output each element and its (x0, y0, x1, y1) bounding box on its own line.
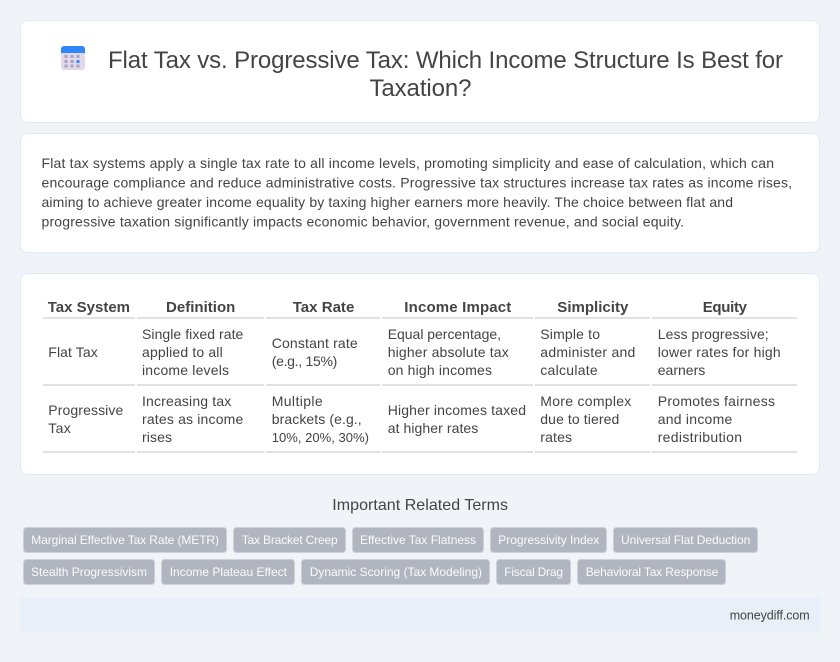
table row: progressive tax (48, 393, 775, 445)
panel: comparison table (20, 274, 820, 474)
table row: progressive tax: Higher incomes taxed (388, 402, 526, 418)
heading: important related terms: Important Related Terms (332, 497, 508, 514)
table row: progressive tax: redistribution (658, 429, 742, 445)
table row: flat tax: Less progressive; (658, 326, 769, 342)
table row: progressive tax: at higher rates (388, 420, 478, 436)
table row: flat tax: (e.g., 15%) (272, 353, 337, 369)
table row: flat tax: on high incomes (388, 362, 492, 378)
table row: flat tax: earners (658, 362, 705, 378)
text block: introduction: progressive taxation significantly impacts economic behavior, government revenue, and social equity. (42, 214, 684, 230)
table row: flat tax: income levels (142, 362, 229, 378)
tag list: related terms: Fiscal Drag (504, 565, 563, 579)
table row: flat tax: calculate (540, 362, 598, 378)
title: Flat Tax vs. Progressive Tax: Which Income Structure Is Best for (108, 47, 783, 74)
text block: introduction: encourage compliance and reduce administrative costs. Progressive tax structures increase tax rates as income rises, (42, 174, 792, 190)
table row: flat tax (48, 326, 781, 378)
table header row: Tax Rate (293, 299, 354, 316)
table row: progressive tax: Promotes fairness (658, 393, 775, 409)
table row: progressive tax: brackets (e.g., (272, 411, 362, 427)
tag list: related terms (24, 528, 758, 584)
footer source text: moneydiff.com (730, 608, 810, 622)
table row: progressive tax: due to tiered (540, 411, 619, 427)
tag list: related terms: Effective Tax Flatness (360, 533, 476, 547)
icon: calendar (61, 46, 85, 70)
table row: progressive tax: Increasing tax (142, 393, 231, 409)
table row: progressive tax: rates as income (142, 411, 244, 427)
table row: progressive tax: Multiple (272, 393, 323, 409)
table row: flat tax: Equal percentage, (388, 326, 501, 342)
table row: flat tax: Constant rate (272, 335, 358, 351)
title (108, 47, 783, 102)
table header row: Definition (166, 299, 235, 316)
tag list: related terms: Income Plateau Effect (170, 565, 288, 579)
table row: flat tax: Single fixed rate (142, 326, 244, 342)
table header row: Income Impact (404, 299, 511, 316)
table row: progressive tax: 10%, 20%, 30%) (272, 430, 369, 445)
tag list: related terms: Stealth Progressivism (31, 565, 147, 579)
table row: progressive tax: rates (540, 429, 572, 445)
table row: flat tax: higher absolute tax (388, 344, 509, 360)
footer bar (20, 598, 820, 632)
text block: introduction (42, 155, 792, 230)
table row: progressive tax: Progressive (48, 402, 124, 418)
title: Taxation? (370, 75, 472, 102)
tag list: related terms: Progressivity Index (498, 533, 599, 547)
table row: progressive tax: rises (142, 429, 172, 445)
table header row: Tax System (48, 299, 130, 316)
table row: flat tax: lower rates for high (658, 344, 781, 360)
table row: flat tax: Flat Tax (48, 344, 98, 360)
text block: introduction: Flat tax systems apply a single tax rate to all income levels, promoting simplicity and ease of calculation, which can (42, 155, 774, 171)
table row: flat tax: Simple to (540, 326, 600, 342)
text block: introduction: aiming to achieve greater income equality by taxing higher earners more heavily. The choice between flat and (42, 194, 733, 210)
tag list: related terms: Marginal Effective Tax Rate (METR) (31, 533, 219, 547)
table row: progressive tax: Tax (48, 420, 71, 436)
tag list: related terms: Tax Bracket Creep (242, 533, 338, 547)
panel: title header (20, 20, 820, 122)
tag list: related terms: Universal Flat Deduction (621, 533, 750, 547)
panel: introduction paragraph (20, 134, 820, 252)
table row: flat tax: administer and (540, 344, 635, 360)
tag list: related terms: Behavioral Tax Response (586, 565, 719, 579)
table header row: Equity (703, 299, 748, 316)
table row: flat tax: applied to all (142, 344, 223, 360)
table row: progressive tax: More complex (540, 393, 631, 409)
tag list: related terms: Dynamic Scoring (Tax Modeling) (310, 565, 482, 579)
table row: progressive tax: and income (658, 411, 733, 427)
table header row: Simplicity (557, 299, 629, 316)
table header row (48, 299, 748, 316)
